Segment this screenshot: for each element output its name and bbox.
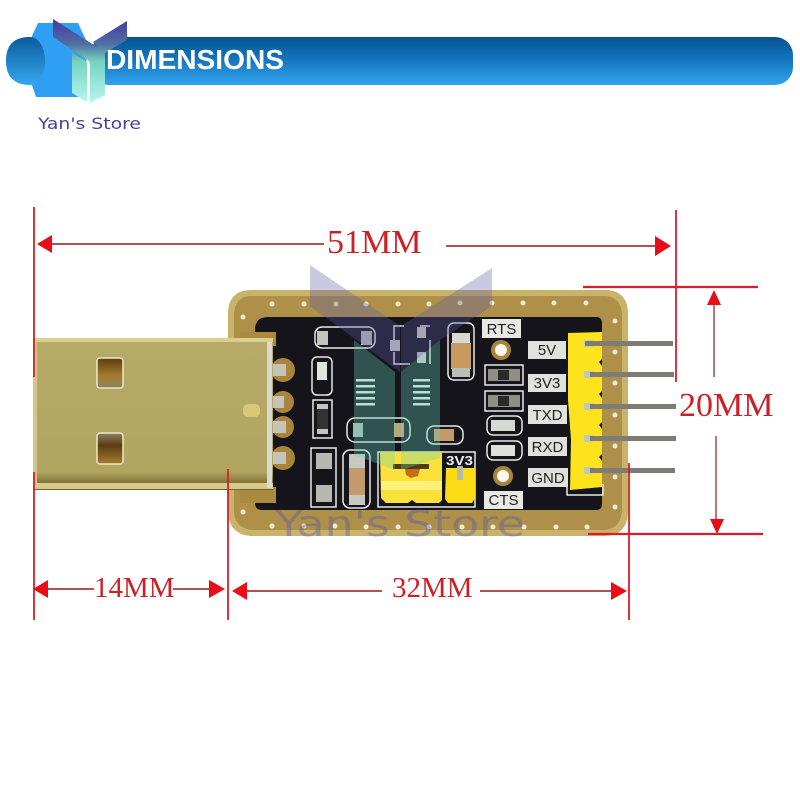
circuit board: [228, 290, 628, 536]
connector dimple: [243, 404, 260, 417]
label: TXD: [528, 405, 567, 424]
label: 14MM: 14MM: [94, 572, 175, 604]
connector hole: bottom: [97, 433, 123, 464]
store name: Yan's Store: [37, 114, 141, 133]
label: RTS: [482, 319, 521, 338]
watermark text: Yan's Store: [274, 504, 525, 545]
pin header: [568, 332, 676, 490]
board edge holes: [240, 300, 618, 530]
label: RXD: RXD: [532, 439, 564, 456]
connector hole: top: [97, 358, 123, 388]
label: RTS: RTS: [487, 321, 516, 338]
label: TXD: TXD: [532, 407, 563, 424]
header banner: [6, 19, 793, 133]
hole: RTS: [491, 340, 511, 360]
dimension: 14MM connector length: [33, 469, 228, 620]
product photo: USB serial adapter: [33, 290, 676, 536]
label: 5V: [528, 341, 566, 359]
component bodies: [316, 327, 520, 505]
label: 20MM: 20MM: [679, 387, 773, 424]
label: CTS: CTS: [488, 492, 518, 509]
USB connector: [33, 338, 273, 490]
banner bar: [90, 37, 793, 85]
dimension: 51MM width: [34, 207, 676, 620]
silkscreen: 3V3: 3V3: [446, 454, 473, 468]
label: 5V: 5V: [538, 342, 556, 359]
USB solder pads: [240, 332, 295, 503]
jumper: [380, 452, 475, 503]
dimension: 32MM board length: [232, 463, 629, 620]
banner title: DIMENSIONS: [106, 44, 284, 75]
dimension: 20MM height: [583, 287, 773, 534]
label: 51MM: 51MM: [327, 224, 421, 261]
label: 3V3: [528, 374, 566, 392]
watermark: Y emblem and store name: [274, 265, 525, 545]
hole: CTS: [493, 466, 513, 486]
label: 32MM: 32MM: [392, 572, 473, 604]
label: GND: GND: [531, 470, 565, 487]
surface-mount components: [311, 323, 603, 508]
logo: nut and Y emblem: [6, 19, 127, 103]
silkscreen header labels: [482, 319, 568, 509]
chip pins: [356, 379, 430, 406]
label: 3V3: 3V3: [534, 375, 560, 392]
